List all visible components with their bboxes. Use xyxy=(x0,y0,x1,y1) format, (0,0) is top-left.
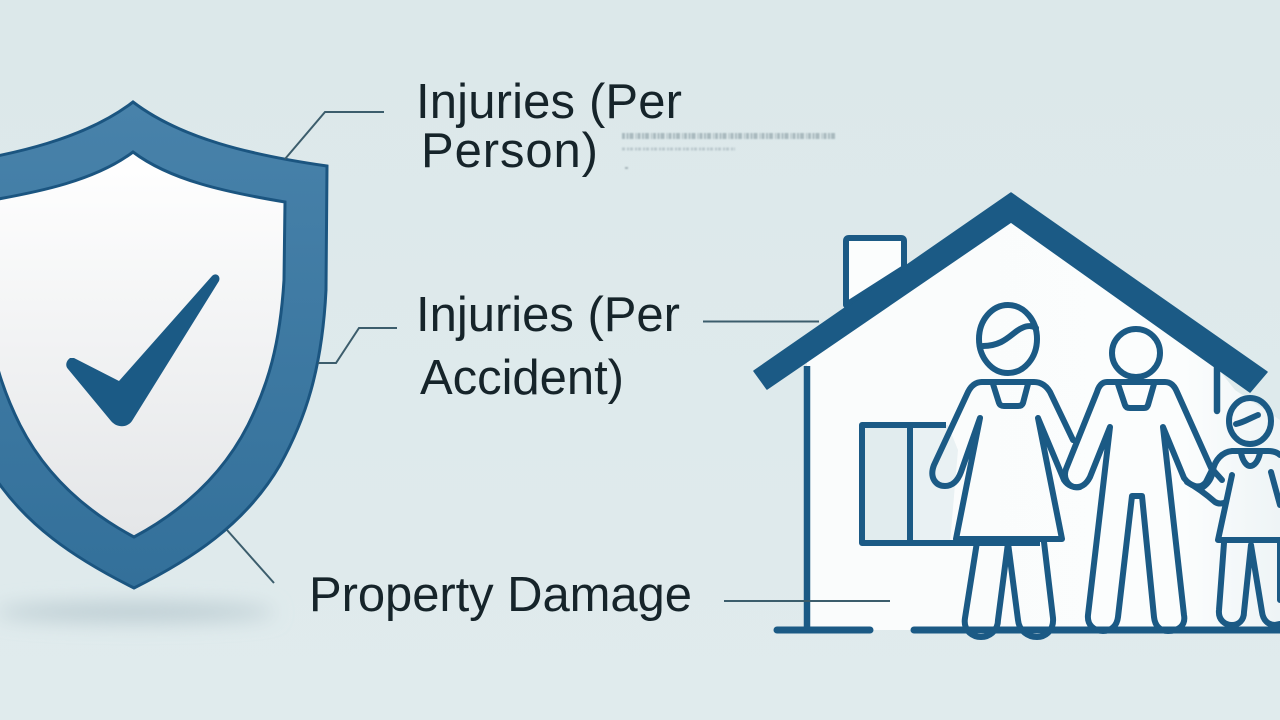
window xyxy=(862,425,1040,543)
label: injuries per accident: Accident) xyxy=(420,351,624,405)
leader line: injuries per accident xyxy=(318,328,397,363)
label: injuries per person: Injuries (Per xyxy=(416,75,682,129)
figure: child xyxy=(1187,398,1280,625)
panel: shield with checkmark xyxy=(0,102,327,588)
figure: father xyxy=(1065,329,1212,631)
leader line: property damage xyxy=(227,530,274,583)
figure: mother xyxy=(932,305,1080,637)
label: injuries per accident: Injuries (Per xyxy=(416,288,680,342)
garbled faint caption xyxy=(622,136,835,168)
icon: check mark xyxy=(66,274,219,426)
shield outer band xyxy=(0,102,327,588)
label: injuries per person: Person) xyxy=(421,124,598,178)
leader line: injuries per person xyxy=(285,112,384,159)
label: property damage: Property Damage xyxy=(309,568,692,622)
ground line xyxy=(777,626,1280,634)
roof xyxy=(754,193,1267,392)
panel: house with family xyxy=(754,193,1280,637)
right wall stub xyxy=(1214,368,1220,411)
chimney xyxy=(846,238,904,305)
shield shadow xyxy=(0,603,275,621)
left wall xyxy=(804,366,810,630)
shield inner panel xyxy=(0,152,285,537)
house body xyxy=(807,220,1280,630)
leader line: house wall xyxy=(724,600,890,602)
leader line: house roof xyxy=(703,320,819,322)
